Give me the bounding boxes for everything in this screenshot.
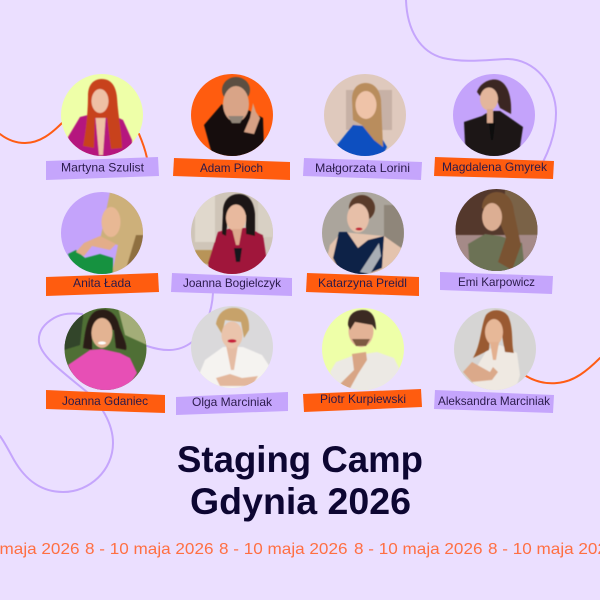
- name tag: Joanna Gdaniec: Joanna Gdaniec: [62, 394, 148, 408]
- name tag: Magdalena Gmyrek: Magdalena Gmyrek: [442, 160, 548, 174]
- portrait: Piotr Kurpiewski: [322, 308, 404, 392]
- name tag: Małgorzata Lorini: Małgorzata Lorini: [315, 161, 410, 175]
- decorative curve: orange left: [0, 123, 62, 143]
- date ticker: 8 - 10 maja 2026: [219, 541, 348, 558]
- speaker: Martyna Szulist: [46, 74, 159, 180]
- speaker: Magdalena Gmyrek: [434, 74, 554, 179]
- date ticker: 8 - 10 maja 2026: [354, 541, 483, 558]
- name tag: Anita Łada: Anita Łada: [73, 276, 131, 290]
- speaker: Piotr Kurpiewski: [303, 308, 422, 412]
- portrait: Katarzyna Preidl: [322, 192, 404, 278]
- speaker: Aleksandra Marciniak: [434, 308, 554, 413]
- speaker: Anita Łada: [46, 192, 159, 296]
- speaker: Olga Marciniak: [176, 306, 288, 415]
- portrait: Joanna Bogielczyk: [191, 192, 273, 276]
- portrait: Olga Marciniak: [191, 306, 273, 390]
- name tag: Katarzyna Preidl: Katarzyna Preidl: [318, 276, 407, 290]
- speaker: Joanna Gdaniec: [46, 308, 165, 413]
- portrait: Martyna Szulist: [61, 74, 143, 160]
- speaker: Katarzyna Preidl: [306, 192, 419, 296]
- portrait: Magdalena Gmyrek: [453, 74, 535, 160]
- portrait: Adam Pioch: [191, 74, 273, 160]
- name tag: Piotr Kurpiewski: Piotr Kurpiewski: [320, 392, 406, 406]
- date ticker: 8 - 10 maja 2026: [85, 541, 214, 558]
- decorative curve: orange right: [526, 358, 600, 383]
- speaker: Małgorzata Lorini: [303, 74, 422, 180]
- title: Staging Camp: [177, 439, 423, 480]
- portrait: Małgorzata Lorini: [324, 74, 406, 160]
- date ticker: [0, 541, 600, 558]
- decorative curve: purple large loop: [0, 313, 113, 492]
- decorative curve: purple top right: [406, 0, 556, 162]
- name tag: Joanna Bogielczyk: Joanna Bogielczyk: [183, 276, 282, 290]
- speaker: Emi Karpowicz: [440, 189, 553, 294]
- name tag: Adam Pioch: Adam Pioch: [200, 161, 263, 175]
- portrait: Joanna Gdaniec: [64, 308, 147, 392]
- name tag: Aleksandra Marciniak: Aleksandra Marciniak: [438, 394, 551, 408]
- title: Gdynia 2026: [190, 481, 411, 522]
- decorative curve: orange short connector: [139, 134, 147, 158]
- name tag: Emi Karpowicz: Emi Karpowicz: [458, 275, 535, 289]
- name tag: Olga Marciniak: Olga Marciniak: [192, 395, 273, 409]
- name tag: Martyna Szulist: Martyna Szulist: [61, 160, 145, 174]
- portrait: Anita Łada: [61, 192, 145, 276]
- speaker: Adam Pioch: [173, 74, 290, 180]
- portrait: Aleksandra Marciniak: [454, 308, 536, 392]
- title: [177, 439, 423, 522]
- decorative curve: purple middle: [147, 293, 213, 350]
- speaker: Joanna Bogielczyk: [171, 192, 292, 296]
- portrait: Emi Karpowicz: [455, 189, 538, 272]
